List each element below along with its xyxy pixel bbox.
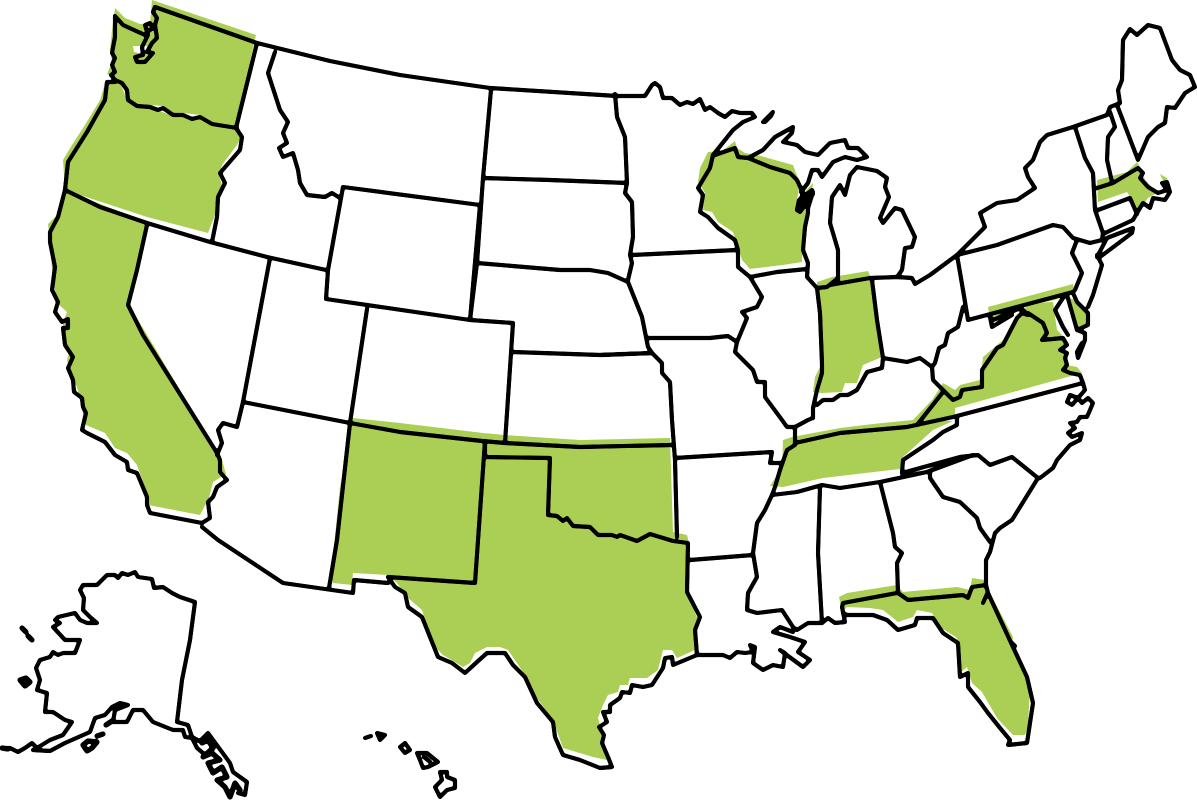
Oregon, Nevada, Idaho and Utah southern line: [65, 190, 326, 270]
North Carolina and Tennessee line: [902, 418, 957, 473]
state fill: Washington: [107, 0, 256, 126]
Indiana and Kentucky river: [817, 358, 883, 405]
Indiana and Michigan line and Lake Erie: [830, 255, 957, 285]
Minnesota and Iowa border: [632, 250, 737, 255]
New Hampshire and Vermont line: [1107, 112, 1115, 182]
Maine: [1117, 25, 1195, 160]
Virginia and West Virginia line: [943, 309, 1028, 400]
state fill: New Mexico, Texas and Oklahoma: [331, 418, 698, 760]
Minnesota west border: [615, 94, 633, 280]
state fill: Virginia: [905, 302, 1082, 430]
Alabama and Mississippi line: [818, 488, 897, 623]
Idaho western borders: [212, 43, 257, 242]
Nevada and Utah east line to Arizona: [217, 258, 270, 455]
New York and Pennsylvania line: [957, 225, 1102, 255]
state fill: Delaware: [1065, 296, 1088, 327]
New Mexico and Texas line: [388, 441, 485, 583]
Massachusetts north line and coast: [1097, 168, 1170, 233]
Texas and Oklahoma line: [485, 441, 700, 655]
Oregon coast: [65, 82, 115, 190]
Wisconsin west and Illinois top: [698, 155, 807, 277]
North and South Carolina line: [902, 455, 1038, 478]
Virginia and Maryland river: [1028, 313, 1083, 383]
Hawaii: [365, 733, 455, 797]
Texas coast and Rio Grande: [388, 577, 697, 768]
Isle Royale: [763, 112, 773, 122]
state fill: Florida: [839, 578, 1030, 735]
Wyoming: [326, 187, 480, 320]
Wisconsin north and Lake Michigan shore: [715, 148, 838, 288]
Tennessee west river: [772, 427, 795, 495]
South Carolina coast and Georgia coast: [986, 478, 1038, 587]
Upper Michigan: [748, 127, 867, 192]
Kansas and Nebraska line: [513, 352, 652, 355]
state fill: Maryland: [988, 284, 1074, 320]
Virginia and Tennessee northern line: [795, 383, 1083, 443]
Alaska panhandle outer coast: [201, 733, 247, 795]
Vermont and New York line: [1075, 127, 1103, 240]
Pennsylvania west and south: [957, 255, 1073, 320]
Kentucky and Virginia line: [917, 392, 943, 425]
state fill: Massachusetts: [1097, 162, 1163, 210]
Mississippi: [747, 495, 822, 630]
Tennessee south line: [772, 455, 973, 495]
Alaska mainland: [2, 572, 203, 753]
state fill: Oregon: [63, 80, 241, 233]
Hawaiian islands: [365, 733, 455, 797]
Ohio and Kentucky river: [883, 358, 932, 367]
Georgia and Florida line: [898, 585, 986, 600]
Green Bay peninsula: [797, 190, 813, 212]
state fill: Wisconsin: [698, 141, 813, 269]
Connecticut and Massachusetts line: [1098, 198, 1137, 214]
California and Nevada border: [128, 225, 217, 453]
South Dakota and Nebraska line: [477, 263, 677, 537]
Missouri and Kansas line: [600, 353, 652, 355]
Alaskan islands: [2, 628, 112, 751]
Long Island: [1097, 228, 1133, 257]
Arkansas and Louisiana line: [690, 555, 753, 560]
Florida lakes and inlets: [983, 594, 1015, 646]
Arizona south line: [202, 527, 388, 593]
Ohio and West Virginia river: [932, 307, 963, 390]
Iowa and Illinois river: [735, 277, 813, 427]
Delaware and Eastern Shore: [1067, 293, 1088, 358]
Alaska panhandle islands: [202, 740, 240, 797]
Arizona north line to New Mexico and Oklahoma: [243, 402, 672, 447]
Louisiana coast: [697, 627, 810, 670]
Iowa and Missouri border: [648, 336, 737, 342]
New York: [957, 103, 1120, 255]
Idaho and Montana border: [268, 52, 340, 198]
Arkansas north line: [675, 452, 782, 463]
Alabama and Georgia line: [880, 482, 902, 593]
Montana and Dakota line: [470, 90, 513, 443]
North Carolina coast: [1040, 383, 1093, 478]
state fill: Indiana: [813, 271, 882, 393]
Alaska: [2, 572, 247, 797]
Georgia and South Carolina river: [930, 472, 990, 542]
New Jersey: [1072, 240, 1102, 307]
state fill: California: [48, 190, 226, 515]
California coast: [50, 190, 227, 523]
Indiana and Ohio line: [872, 280, 883, 358]
Lower Michigan: [830, 167, 915, 280]
Florida coast: [843, 585, 1033, 745]
North and South Dakota line: [483, 178, 627, 183]
Chesapeake Bay: [1055, 298, 1068, 335]
Illinois and Indiana line: [813, 288, 822, 418]
northern border: [155, 7, 755, 155]
Washington and Oregon border: [115, 80, 237, 128]
state fill: Tennessee: [770, 420, 953, 487]
state fill: Cape Cod: [1160, 174, 1168, 184]
Utah, Colorado, New Mexico line: [329, 309, 367, 588]
Washington coast and Puget Sound: [111, 7, 157, 80]
